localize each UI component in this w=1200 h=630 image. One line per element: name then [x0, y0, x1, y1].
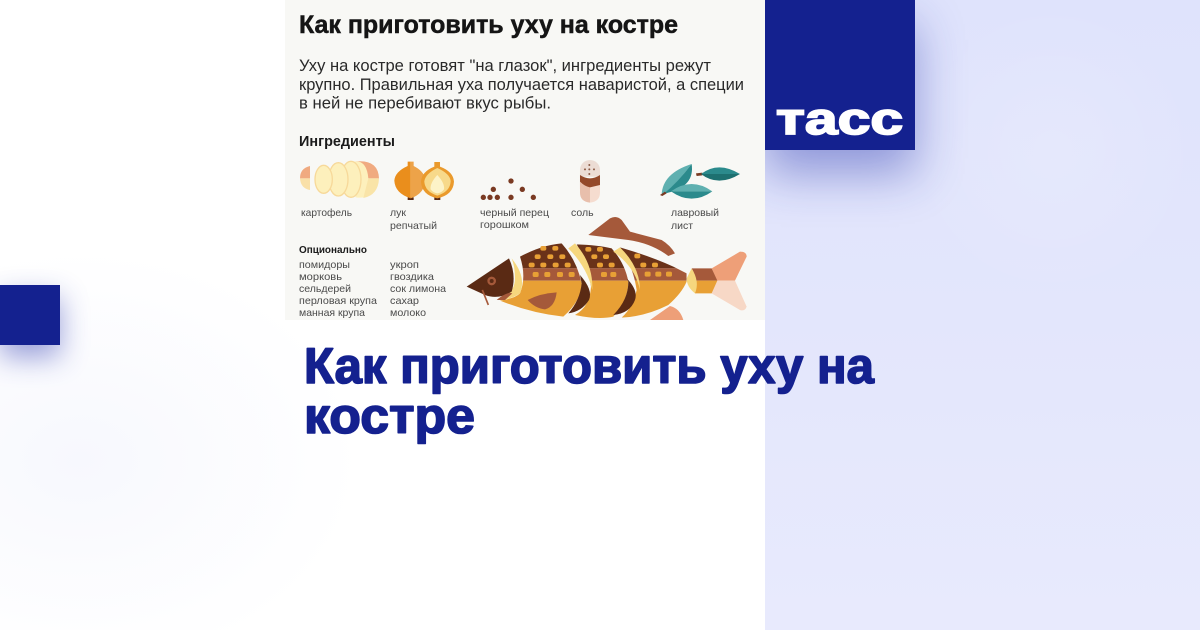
optional list: гвоздика	[390, 271, 434, 283]
intro text: Уху на костре готовят "на глазок", ингредиенты режут	[299, 57, 711, 75]
logo square	[765, 0, 915, 150]
icon: black pepper	[481, 178, 536, 200]
optional list: молоко	[390, 307, 426, 319]
ingredient labels: картофель	[301, 207, 353, 219]
optional heading: Опционально	[299, 244, 367, 256]
panel: right background	[765, 0, 1200, 630]
ingredient labels: репчатый	[390, 220, 437, 232]
intro text: крупно. Правильная уха получается наваристой, а специи	[299, 76, 744, 94]
ingredients heading: Ингредиенты	[299, 134, 395, 150]
image title: Как приготовить уху на костре	[299, 11, 678, 39]
icon: onion	[394, 162, 454, 200]
panel: infographic image	[285, 0, 765, 321]
logo text: тасс	[776, 95, 903, 144]
optional list: манная крупа	[299, 307, 365, 319]
ingredient labels: соль	[571, 207, 594, 219]
icon: bay leaves	[660, 164, 740, 199]
intro text	[299, 57, 744, 112]
optional list: помидоры	[299, 259, 350, 271]
ingredient labels: лук	[390, 207, 406, 219]
intro text: в ней не перебивают вкус рыбы.	[299, 94, 551, 112]
optional list: сахар	[390, 295, 419, 307]
optional list: сельдерей	[299, 283, 351, 295]
optional list	[299, 259, 446, 319]
optional list: сок лимона	[390, 283, 446, 295]
optional list: перловая крупа	[299, 295, 377, 307]
optional list: укроп	[390, 259, 419, 271]
decorative square left	[0, 285, 60, 345]
ingredient labels: горошком	[480, 219, 529, 231]
icon: salt	[580, 160, 600, 203]
ingredient labels: черный перец	[480, 207, 549, 219]
icon: fish	[467, 217, 747, 321]
main title	[304, 338, 875, 444]
ingredient labels: лавровый	[671, 207, 719, 219]
ingredient labels	[302, 208, 718, 231]
main title: Как приготовить уху на	[304, 338, 875, 394]
main title: костре	[304, 388, 475, 444]
optional list: морковь	[299, 271, 343, 283]
icon: potato	[300, 161, 379, 198]
ingredient labels: лист	[671, 220, 693, 232]
